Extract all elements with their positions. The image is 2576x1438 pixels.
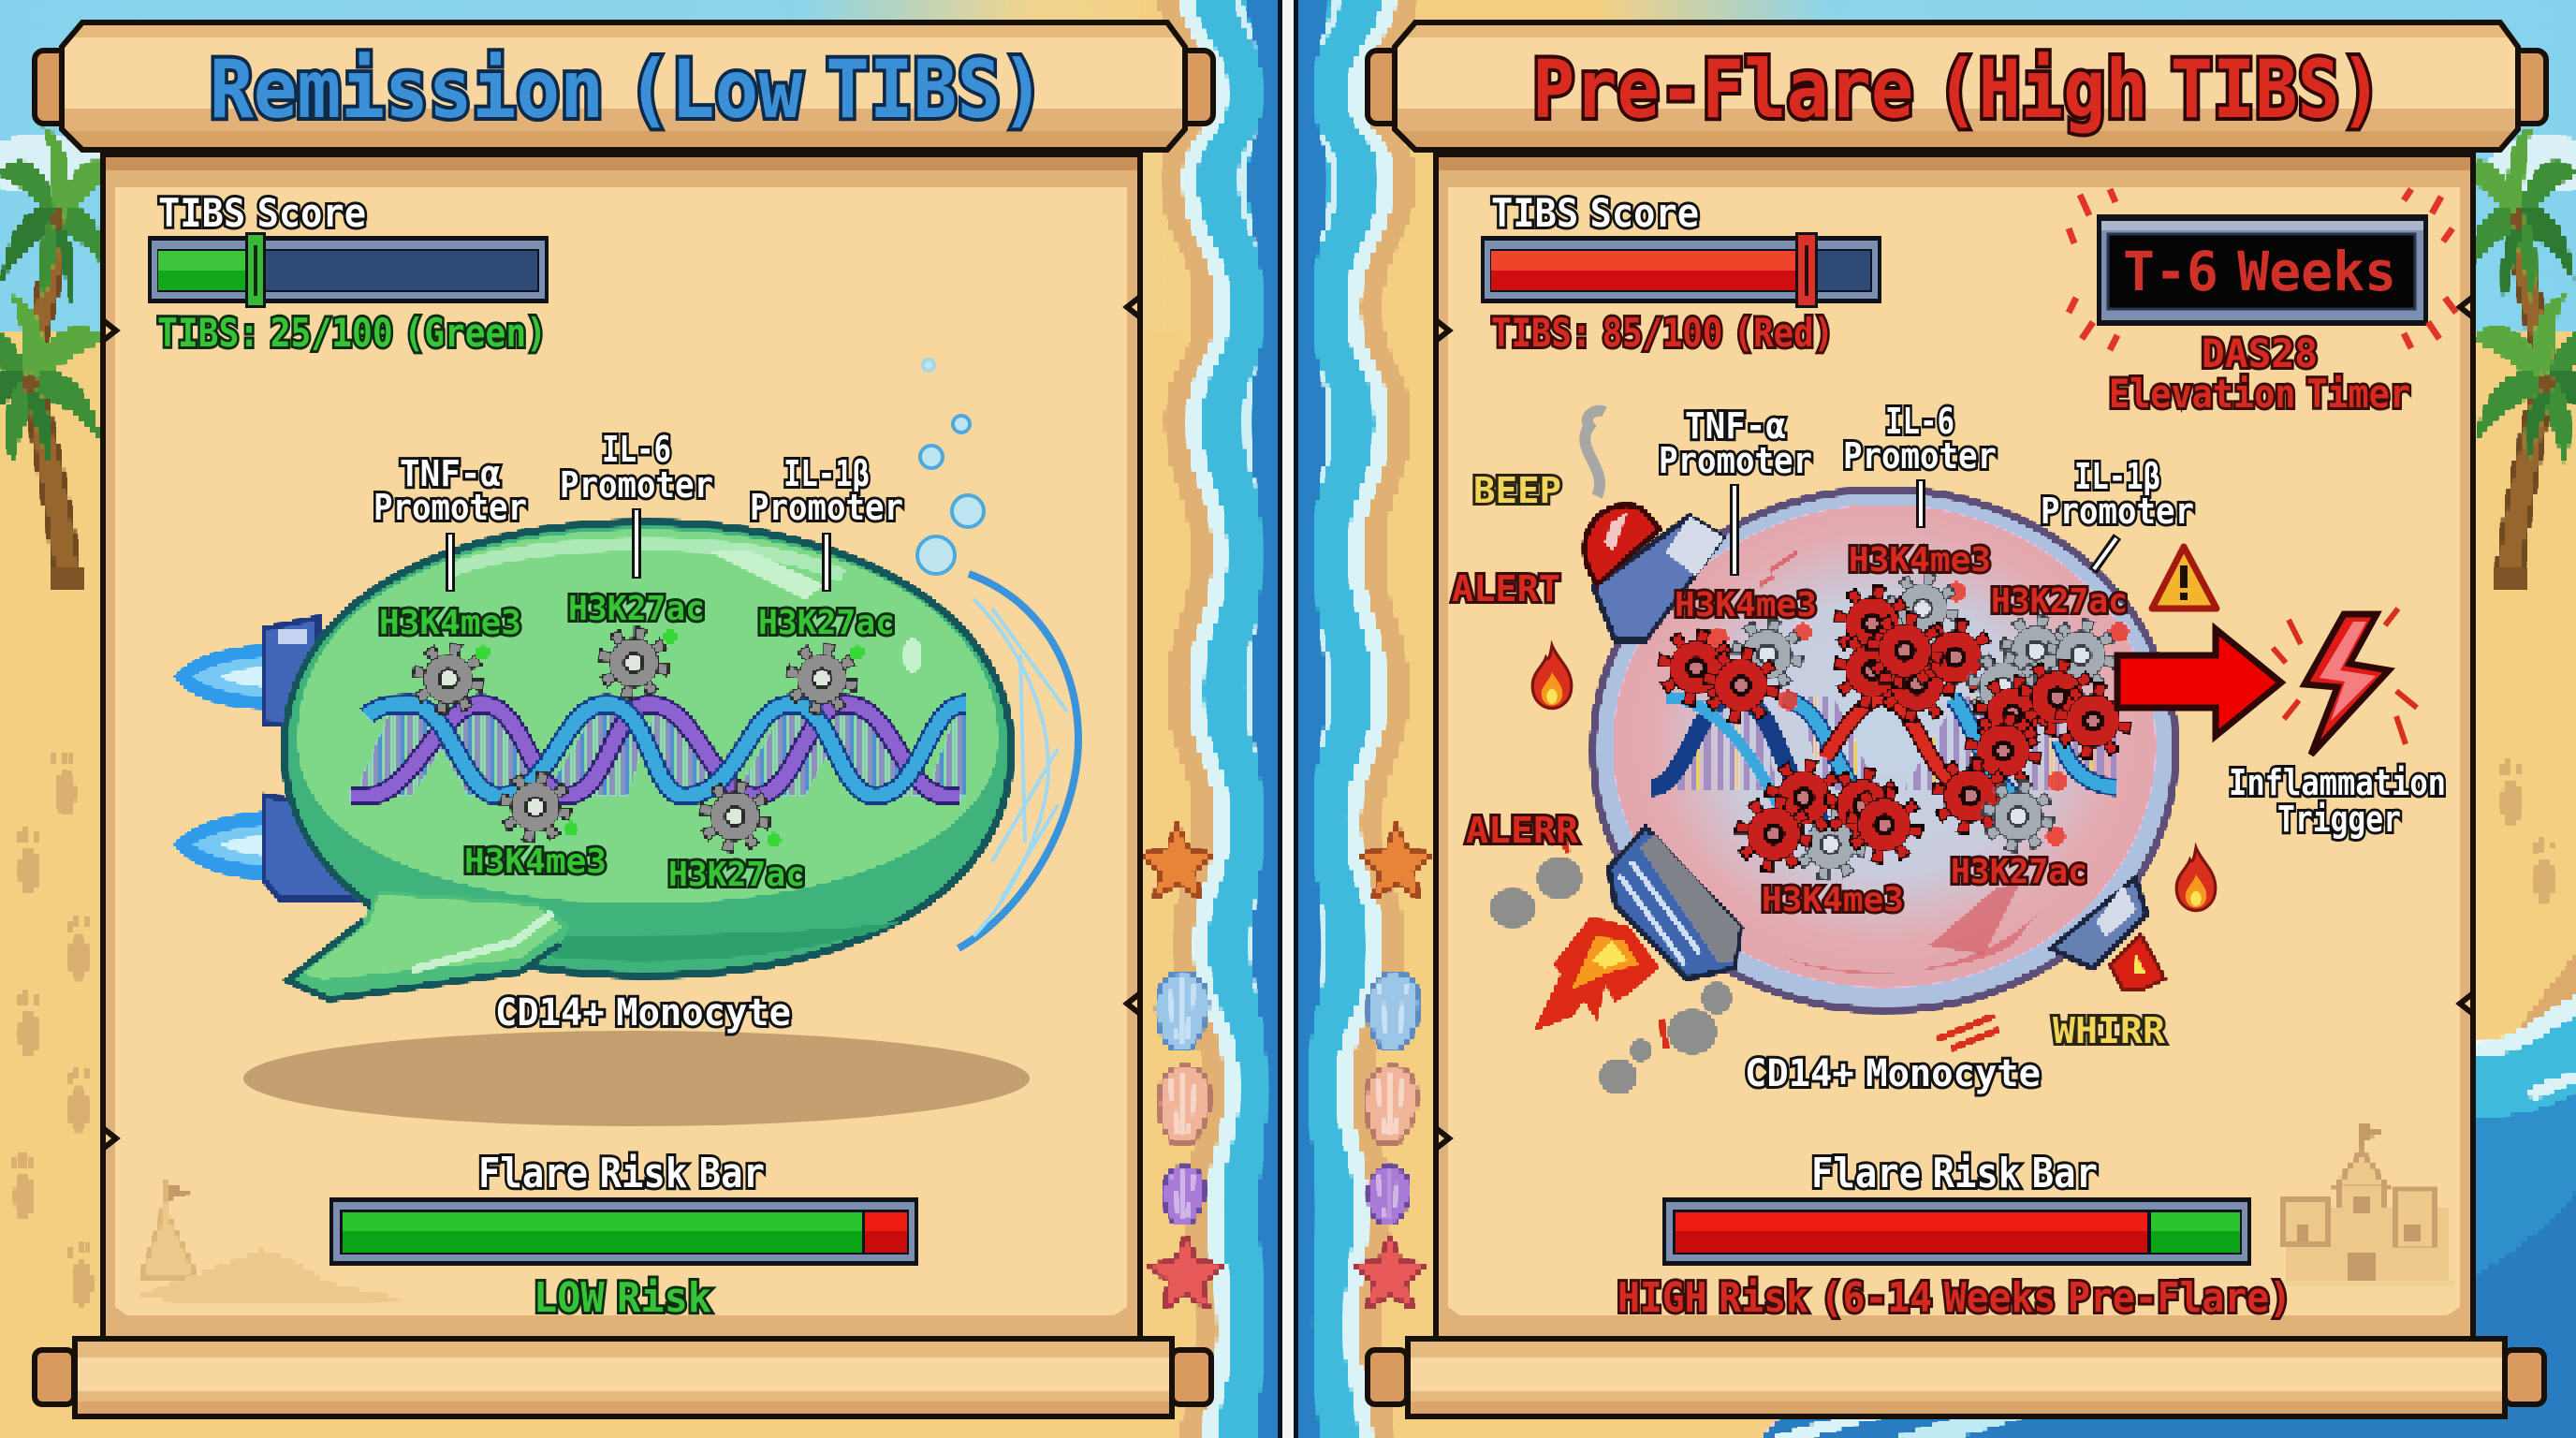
label: inflammation trigger bbox=[2229, 762, 2446, 840]
promoter labels and pointers: IL-6 bbox=[1885, 401, 1954, 442]
histone mark labels: H3K27ac bbox=[568, 590, 705, 628]
label: TIBS score: TIBS Score bbox=[1491, 190, 1699, 236]
score text: 25/100: TIBS: 25/100 (Green) bbox=[157, 310, 547, 356]
gear clusters bbox=[1665, 580, 2124, 873]
label: monocyte: CD14+ Monocyte bbox=[1745, 1052, 2041, 1095]
label: inflammation trigger: Inflammation bbox=[2229, 762, 2446, 803]
dna strand red bbox=[1825, 697, 1975, 787]
icon: lower-left engine bbox=[1609, 828, 1741, 978]
histone mark labels: H3K27ac bbox=[758, 604, 895, 642]
icon: rear engine exhaust bbox=[1534, 917, 1659, 1031]
label: flare risk bar: Flare Risk Bar bbox=[478, 1150, 765, 1197]
countdown timer: T-6 Weeks bbox=[2123, 240, 2396, 303]
palm trees bbox=[0, 126, 2576, 588]
promoter labels and pointers: TNF-α bbox=[400, 453, 501, 494]
green methyl marks bbox=[476, 629, 865, 847]
histone mark labels: H3K4me3 bbox=[1849, 541, 1991, 580]
promoter labels and pointers bbox=[1659, 401, 2194, 576]
histone mark labels: H3K4me3 bbox=[1675, 586, 1817, 624]
footprints in sand bbox=[11, 751, 2554, 1306]
histone mark labels: H3K27ac bbox=[1951, 853, 2087, 891]
sandcastle bbox=[2280, 1122, 2452, 1288]
dna strand purple bbox=[350, 704, 960, 796]
histone mark labels: H3K4me3 bbox=[1762, 881, 1904, 919]
timer caption: Elevation Timer bbox=[2109, 371, 2410, 417]
icon: lightning bolt bbox=[2273, 609, 2417, 755]
icon: alarm beacon bbox=[1585, 506, 1723, 640]
sound effects: BEEP bbox=[1473, 470, 1561, 511]
shells and starfish on the shore bbox=[1142, 825, 1432, 1309]
icon: lower thruster bbox=[174, 796, 365, 899]
risk verdict: low: LOW Risk bbox=[534, 1274, 711, 1322]
dna strand blue bbox=[367, 704, 965, 796]
membrane body bbox=[285, 522, 1011, 976]
panel: remission scroll bbox=[35, 22, 1213, 1416]
label: TIBS score: TIBS Score bbox=[158, 190, 366, 236]
histone mark labels: H3K27ac bbox=[1991, 582, 2128, 621]
gauge: flare risk low bbox=[329, 1197, 918, 1266]
monocyte airship bbox=[174, 522, 1011, 999]
score text: 85/100: TIBS: 85/100 (Red) bbox=[1491, 310, 1834, 356]
promoter labels and pointers: Promoter bbox=[1659, 440, 1812, 481]
histone mark labels bbox=[1675, 541, 2128, 919]
damaged monocyte bbox=[1490, 490, 2175, 1094]
icon: flame left bbox=[1532, 645, 1572, 709]
sound effects: WHIRR bbox=[2053, 1010, 2165, 1051]
label: monocyte: CD14+ Monocyte bbox=[495, 991, 791, 1034]
gauge: flare risk high bbox=[1662, 1197, 2251, 1266]
sound effects: ALERR bbox=[1466, 810, 1578, 851]
fin bbox=[288, 891, 569, 999]
arrow: inflammation output bbox=[2117, 629, 2281, 736]
promoter labels and pointers: TNF-α bbox=[1685, 405, 1786, 447]
promoter labels and pointers: IL-1β bbox=[2074, 456, 2160, 497]
countdown timer bbox=[2097, 214, 2428, 326]
cell body bbox=[1593, 490, 2175, 1010]
gauge: TIBS score 25 bbox=[148, 232, 549, 308]
risk verdict: high: HIGH Risk (6-14 Weeks Pre-Flare) bbox=[1617, 1274, 2291, 1322]
promoter labels and pointers: Promoter bbox=[1843, 435, 1997, 477]
promoter labels and pointers: Promoter bbox=[750, 487, 903, 528]
panel: pre-flare scroll bbox=[1368, 22, 2546, 1416]
label: flare risk bar: Flare Risk Bar bbox=[1811, 1150, 2098, 1197]
title: pre-flare: Pre-Flare (High TIBS) bbox=[1532, 43, 2382, 137]
shadow under the monocyte bbox=[243, 1031, 1030, 1126]
timer caption bbox=[2109, 330, 2410, 417]
promoter labels and pointers: Promoter bbox=[373, 487, 527, 528]
histone mark labels: H3K27ac bbox=[668, 856, 805, 894]
sand mound bbox=[136, 1181, 404, 1303]
dna strand blue bbox=[1652, 697, 2117, 824]
histone mark labels bbox=[379, 590, 895, 894]
title: remission: Remission (Low TIBS) bbox=[210, 43, 1045, 137]
icon: lower-right engine bbox=[2051, 878, 2164, 989]
net bbox=[959, 574, 1078, 948]
dna rungs bbox=[358, 715, 966, 797]
alarm sparks bbox=[2069, 189, 2456, 350]
label: inflammation trigger: Trigger bbox=[2277, 799, 2401, 840]
dna rungs bbox=[1651, 697, 2117, 791]
smoke puffs bbox=[1490, 858, 1732, 1094]
debris sparks bbox=[1540, 824, 1998, 1049]
promoter labels and pointers: IL-1β bbox=[783, 453, 870, 494]
promoter labels and pointers bbox=[373, 429, 903, 592]
central divider bbox=[1278, 0, 1298, 1438]
icon: flame right bbox=[2176, 847, 2216, 911]
gauge: TIBS score 85 bbox=[1481, 232, 1881, 308]
sound effects: ALERT bbox=[1452, 568, 1560, 609]
glowing marks bbox=[1706, 581, 2130, 846]
timer caption: DAS28 bbox=[2202, 330, 2318, 376]
promoter labels and pointers: IL-6 bbox=[602, 429, 671, 470]
histone mark labels: H3K4me3 bbox=[464, 843, 607, 881]
icon: warning triangle bbox=[2152, 547, 2217, 609]
promoter labels and pointers: Promoter bbox=[2041, 491, 2194, 532]
promoter labels and pointers: Promoter bbox=[560, 464, 713, 506]
grey histone gears bbox=[419, 634, 851, 845]
bubbles bbox=[917, 360, 984, 574]
sound effects bbox=[1452, 470, 2165, 1051]
histone mark labels: H3K4me3 bbox=[379, 604, 521, 642]
icon: upper thruster bbox=[174, 618, 318, 727]
smoke from beacon bbox=[1585, 411, 1604, 496]
